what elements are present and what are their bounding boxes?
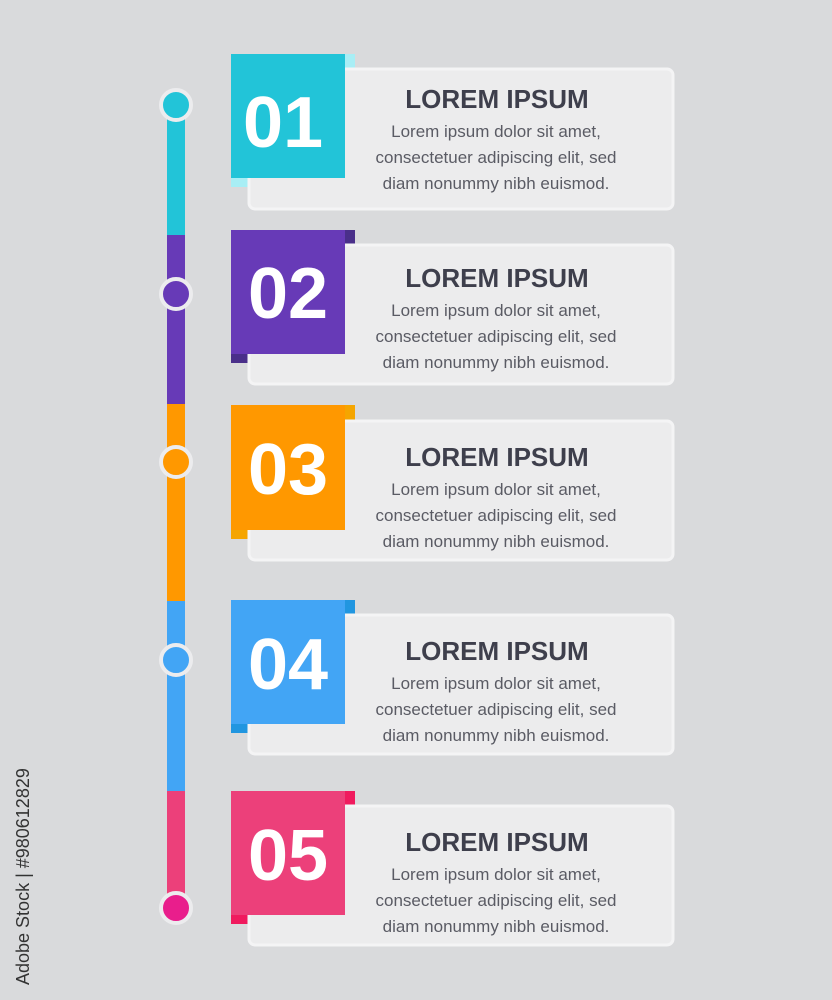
body 3: Lorem ipsum dolor sit amet, [391,480,601,499]
marker 1 [161,90,191,120]
timeline [167,105,185,908]
marker 4 [161,645,191,675]
item 3 [231,405,673,560]
body 4: consectetuer adipiscing elit, sed [376,700,616,719]
heading 5: LOREM IPSUM [405,827,589,857]
number 05: 05 [248,816,328,896]
body 2: Lorem ipsum dolor sit amet, [391,301,601,320]
heading 2: LOREM IPSUM [405,263,589,293]
body 1: consectetuer adipiscing elit, sed [376,148,616,167]
body 4: diam nonummy nibh euismod. [383,726,609,745]
body 2: diam nonummy nibh euismod. [383,353,609,372]
item 1 [231,54,673,209]
heading 3: LOREM IPSUM [405,442,589,472]
number 01: 01 [243,83,323,163]
body 4: Lorem ipsum dolor sit amet, [391,674,601,693]
body 5: Lorem ipsum dolor sit amet, [391,865,601,884]
heading 4: LOREM IPSUM [405,636,589,666]
number 02: 02 [248,254,328,334]
item 2 [231,230,673,384]
body 3: consectetuer adipiscing elit, sed [376,506,616,525]
watermark credit: Adobe Stock | #980612829 [13,768,33,985]
item 4 [231,600,673,754]
body 3: diam nonummy nibh euismod. [383,532,609,551]
body 5: diam nonummy nibh euismod. [383,917,609,936]
body 5: consectetuer adipiscing elit, sed [376,891,616,910]
number 03: 03 [248,430,328,510]
body 2: consectetuer adipiscing elit, sed [376,327,616,346]
marker 3 [161,447,191,477]
heading 1: LOREM IPSUM [405,84,589,114]
body 1: Lorem ipsum dolor sit amet, [391,122,601,141]
body 1: diam nonummy nibh euismod. [383,174,609,193]
marker 2 [161,279,191,309]
item 5 [231,791,673,945]
marker 5 [161,893,191,923]
number 04: 04 [248,625,328,705]
